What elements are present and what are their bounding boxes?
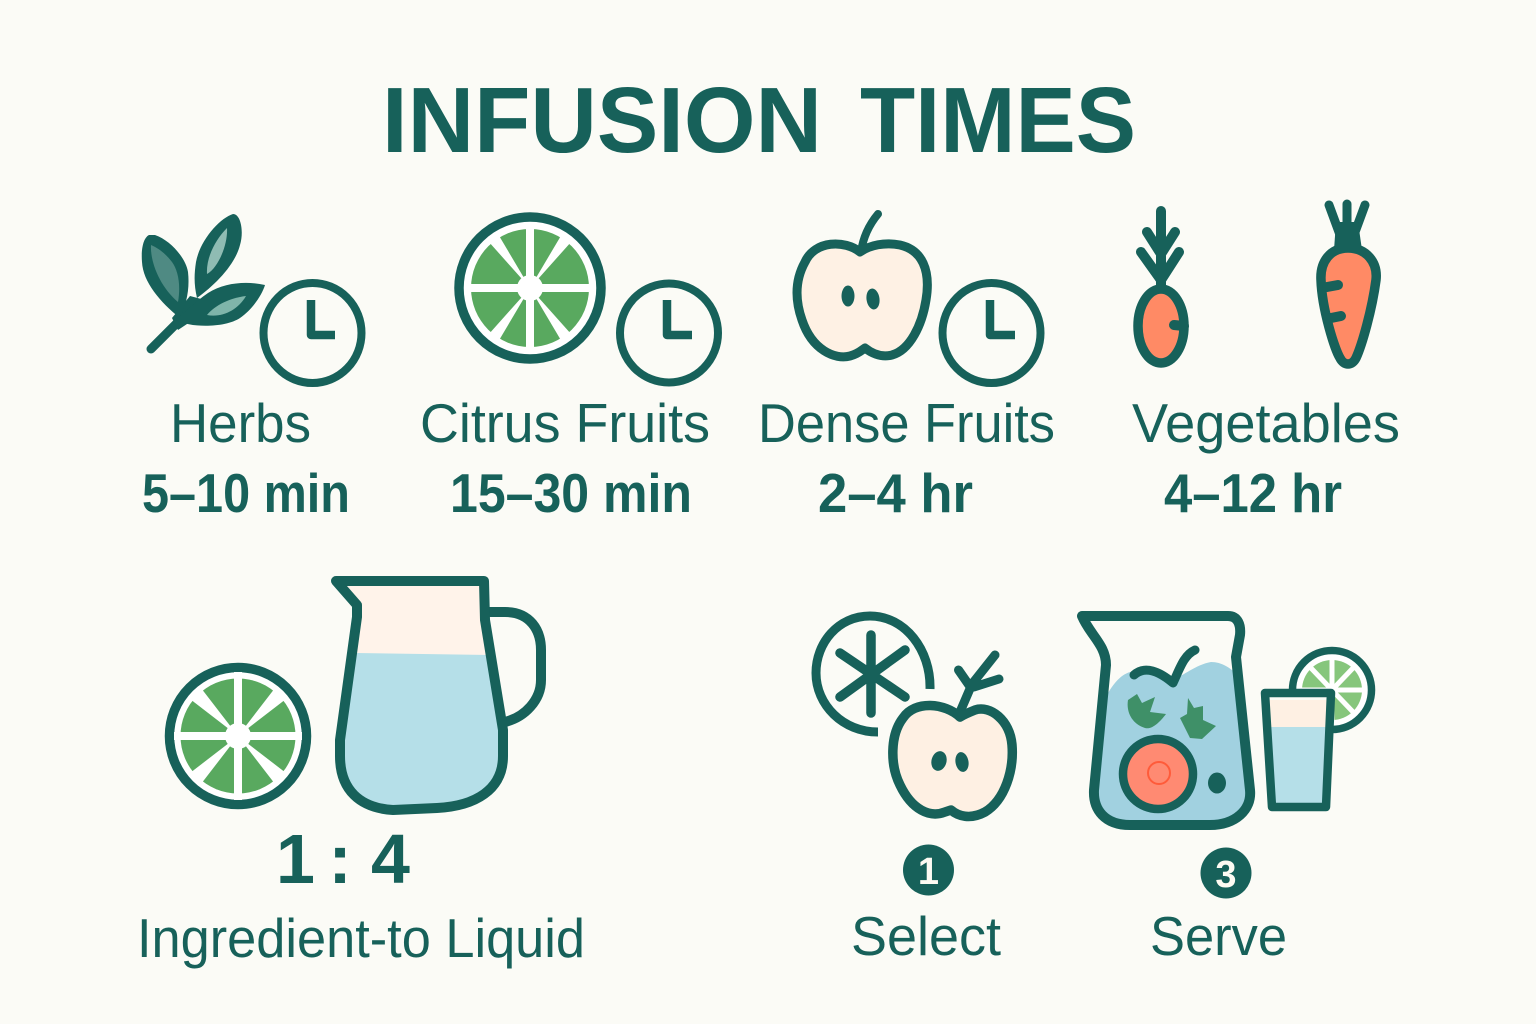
title: INFUSION — [382, 68, 822, 172]
icon: apple — [893, 655, 1012, 816]
label: dense fruits: Dense Fruits — [758, 392, 1055, 454]
icon: citrus slice — [170, 668, 306, 804]
panel: step 1 select — [816, 616, 1012, 967]
badge: step 3: 3 — [1215, 854, 1237, 896]
panel: vegetables — [1132, 204, 1400, 524]
ratio value: 4 — [371, 820, 410, 898]
icon: small carrot — [1138, 211, 1184, 363]
panel: citrus fruits — [420, 217, 718, 524]
icon: herb sprig — [142, 214, 265, 349]
icon: garnish lime — [1292, 650, 1372, 730]
icon: apple — [797, 214, 927, 357]
ratio value: : — [328, 820, 352, 898]
icon: large carrot — [1321, 204, 1376, 364]
badge: step 1 — [903, 844, 954, 896]
time: citrus fruits: 15–30 min — [450, 462, 692, 524]
icon: citrus outline — [816, 616, 930, 732]
label: select: Select — [851, 905, 1001, 967]
badge: step 1: 1 — [918, 851, 939, 893]
time: dense fruits: 2–4 hr — [818, 462, 973, 524]
icon: infused pitcher — [1082, 616, 1250, 825]
label: vegetables: Vegetables — [1132, 392, 1400, 454]
panel: step 3 serve — [1082, 616, 1372, 967]
icon: glass — [1265, 693, 1331, 807]
ratio value: 1 — [276, 820, 315, 898]
icon: clock — [264, 283, 362, 383]
icon: citrus slice — [459, 217, 601, 359]
panel: herbs — [142, 214, 362, 524]
title — [382, 68, 1136, 172]
panel: dense fruits — [758, 214, 1055, 524]
title: TIMES — [860, 68, 1136, 172]
time: herbs: 5–10 min — [142, 462, 350, 524]
ratio value — [276, 820, 410, 898]
label: citrus fruits: Citrus Fruits — [420, 392, 710, 454]
icon: clock — [620, 284, 718, 382]
ratio label: Ingredient-to Liquid — [137, 907, 585, 969]
badge: step 3 — [1200, 848, 1252, 898]
icon: clock — [942, 283, 1040, 383]
icon: pitcher — [336, 581, 541, 810]
panel: ratio — [137, 581, 585, 969]
label: serve: Serve — [1150, 905, 1287, 967]
time: vegetables: 4–12 hr — [1164, 462, 1342, 524]
label: herbs: Herbs — [170, 392, 311, 454]
